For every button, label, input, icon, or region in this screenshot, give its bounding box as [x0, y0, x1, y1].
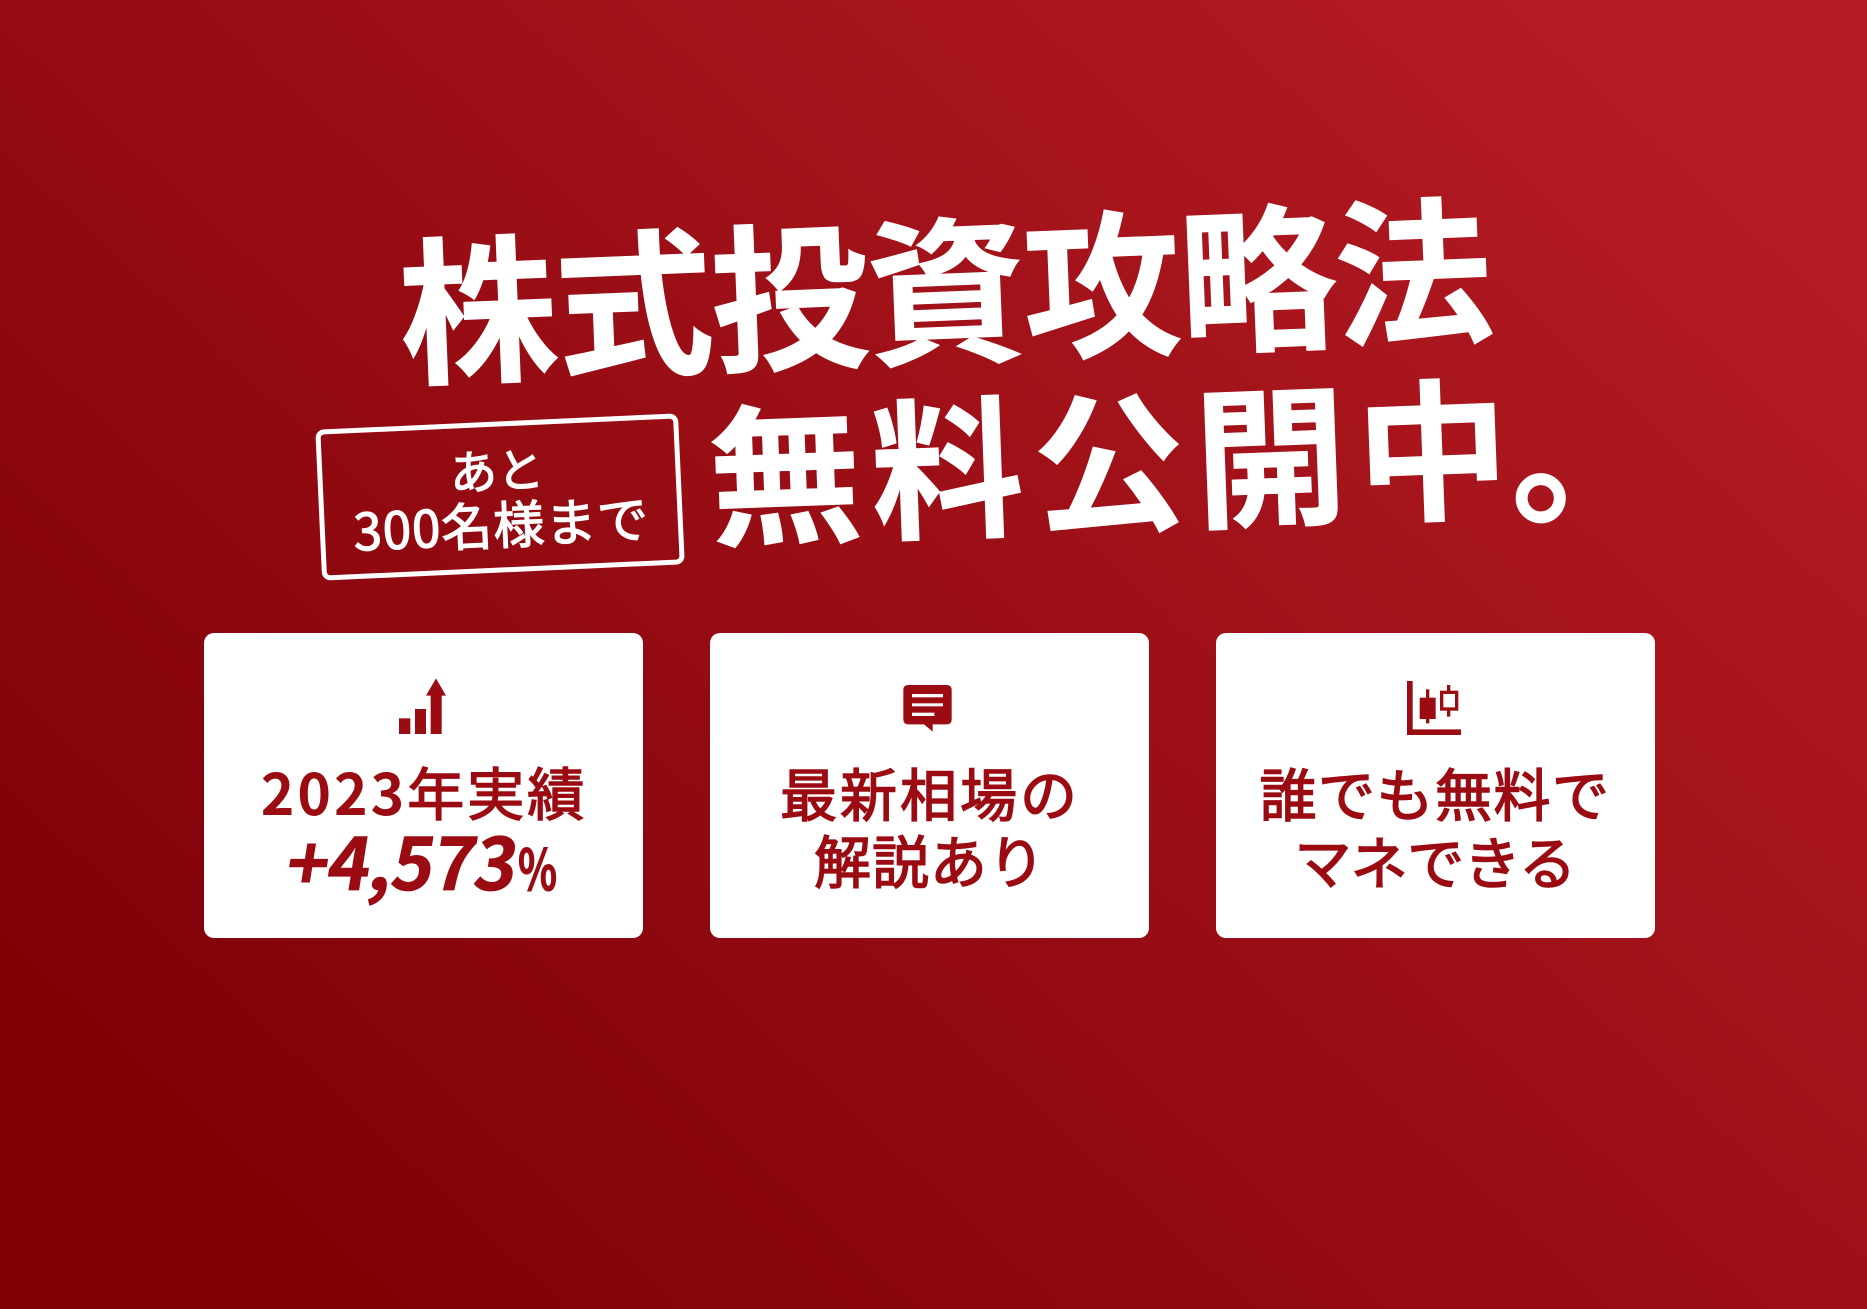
percent sign: % — [518, 826, 557, 907]
icon: speech bubble — [903, 685, 952, 732]
title line 1: 株式投資攻略法 — [394, 146, 1495, 419]
title line 2: 無料公開中 — [705, 329, 1522, 579]
panel: anyone can copy for free — [1216, 633, 1655, 938]
badge text line 2: 300名様まで — [352, 478, 651, 566]
title line 2: 。 — [1505, 331, 1675, 556]
panel: 2023 results — [204, 633, 643, 938]
icon: rising bars with arrow — [399, 678, 446, 734]
icon: candlestick chart — [1407, 681, 1461, 735]
badge text line 1: あと — [448, 431, 545, 504]
panel: latest market commentary — [710, 633, 1149, 938]
badge: remaining seats — [318, 416, 682, 578]
free text line 2: マネできる — [1294, 819, 1576, 901]
commentary text line 1: 最新相場の — [780, 751, 1080, 833]
free text line 1: 誰でも無料で — [1260, 751, 1610, 833]
results label: 2023年実績 — [261, 750, 587, 832]
results value: +4,573 — [280, 807, 526, 911]
commentary text line 2: 解説あり — [814, 818, 1046, 900]
